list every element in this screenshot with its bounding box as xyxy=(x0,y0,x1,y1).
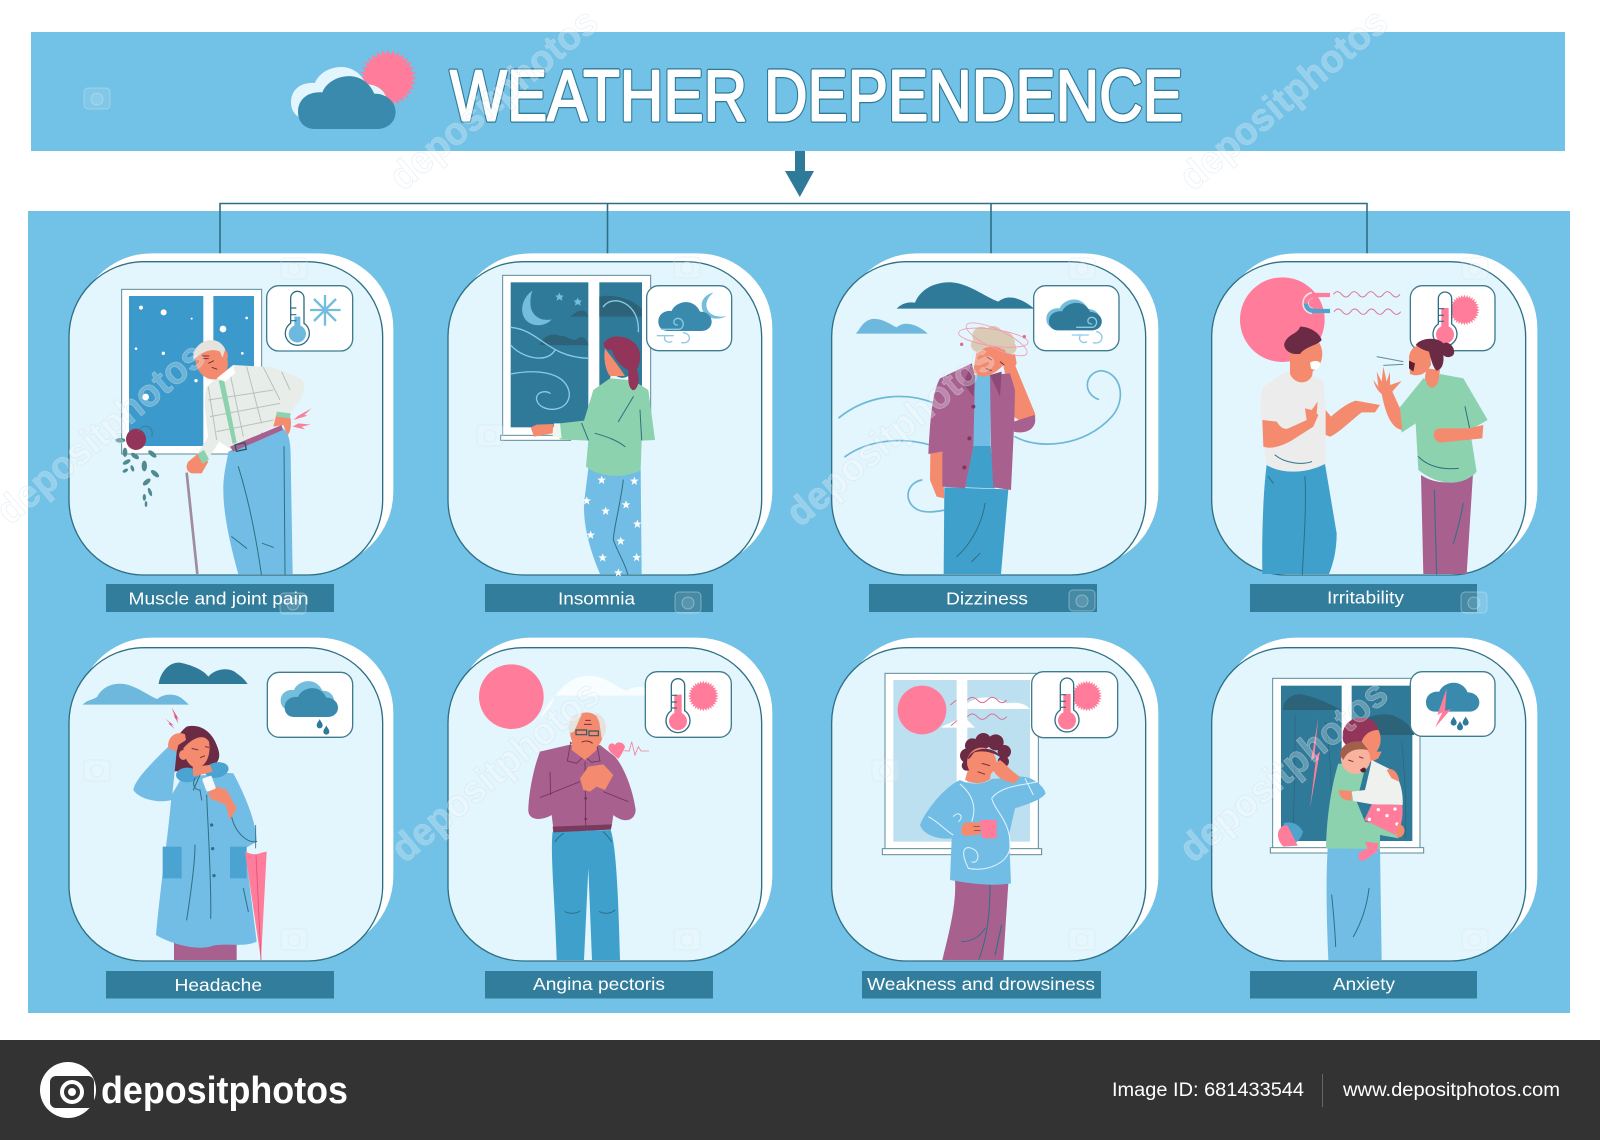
card: headache xyxy=(69,638,393,961)
icon: thunderstorm xyxy=(1410,672,1495,736)
main panel background xyxy=(28,211,1570,1013)
icon: cloud and wind xyxy=(1034,286,1119,351)
icon: rain cloud xyxy=(267,672,353,737)
card: angina pectoris xyxy=(448,638,772,961)
label: anxiety: Anxiety xyxy=(1333,974,1395,994)
label: irritability xyxy=(1250,584,1477,612)
icon: heat xyxy=(1410,286,1495,351)
icon: cold weather xyxy=(267,286,353,351)
header banner xyxy=(31,32,1565,151)
big sun xyxy=(479,664,544,729)
card: dizziness xyxy=(832,253,1158,575)
clouds xyxy=(83,663,248,705)
label: headache: Headache xyxy=(174,975,262,995)
footer bar xyxy=(0,1040,1600,1140)
label: muscle and joint pain: Muscle and joint pain xyxy=(128,588,308,608)
big sun and magnet xyxy=(1240,277,1401,362)
label: dizziness xyxy=(869,584,1097,612)
shouting woman xyxy=(1373,339,1488,574)
footer logo xyxy=(40,1062,96,1118)
watermark text overlay xyxy=(0,0,1396,871)
image id: Image ID: 681433544 xyxy=(1112,1080,1304,1101)
window with snow xyxy=(122,289,262,454)
stormy window xyxy=(1270,678,1424,853)
label: angina pectoris xyxy=(485,971,713,998)
label: weakness and drowsiness xyxy=(862,971,1101,998)
watermark text overlay: depositphotos xyxy=(383,672,608,871)
icon: sun behind cloud xyxy=(291,44,422,129)
man in white t-shirt xyxy=(1261,327,1380,574)
footer brand name: depositphotos xyxy=(101,1070,348,1112)
label: muscle and joint pain xyxy=(106,584,334,612)
pain bolts xyxy=(165,708,179,729)
woman at window xyxy=(531,336,655,577)
title: WEATHER DEPENDENCE xyxy=(450,57,1183,137)
label: anxiety xyxy=(1250,971,1477,998)
card: weakness and drowsiness xyxy=(832,638,1158,961)
sunny window xyxy=(882,673,1042,855)
night window xyxy=(501,275,651,440)
label: dizziness: Dizziness xyxy=(946,588,1028,608)
parent holding child xyxy=(1326,718,1405,960)
label: insomnia: Insomnia xyxy=(558,588,635,608)
website url: www.depositphotos.com xyxy=(1342,1080,1560,1101)
clouds xyxy=(856,282,1034,334)
card: muscle and joint pain xyxy=(69,253,393,575)
icon: heat xyxy=(1032,672,1118,738)
label: weakness and drowsiness: Weakness and drowsiness xyxy=(867,974,1095,994)
card: insomnia xyxy=(448,253,772,577)
wind swirls xyxy=(839,371,1120,512)
watermark text overlay: depositphotos xyxy=(1171,672,1396,871)
dizzy woman xyxy=(928,317,1035,574)
woman with coat and umbrella xyxy=(133,726,267,960)
icon: windy night xyxy=(647,286,732,351)
label: angina pectoris: Angina pectoris xyxy=(533,974,665,994)
icon: heat xyxy=(645,672,731,737)
connector lines xyxy=(220,204,1367,262)
watermark text overlay: depositphotos xyxy=(778,336,1003,535)
card: irritability xyxy=(1212,253,1537,575)
card: anxiety xyxy=(1212,638,1537,961)
label: headache xyxy=(106,971,334,998)
arrow: title to panel xyxy=(785,151,814,197)
watermark camera marks xyxy=(84,88,1488,950)
elderly man with cane xyxy=(187,338,312,574)
potted plant xyxy=(115,426,160,507)
label: insomnia xyxy=(485,584,713,612)
faint clouds xyxy=(540,676,648,717)
label: irritability: Irritability xyxy=(1327,588,1404,608)
woman rubbing her eye xyxy=(920,733,1046,960)
man clutching chest xyxy=(528,712,649,960)
